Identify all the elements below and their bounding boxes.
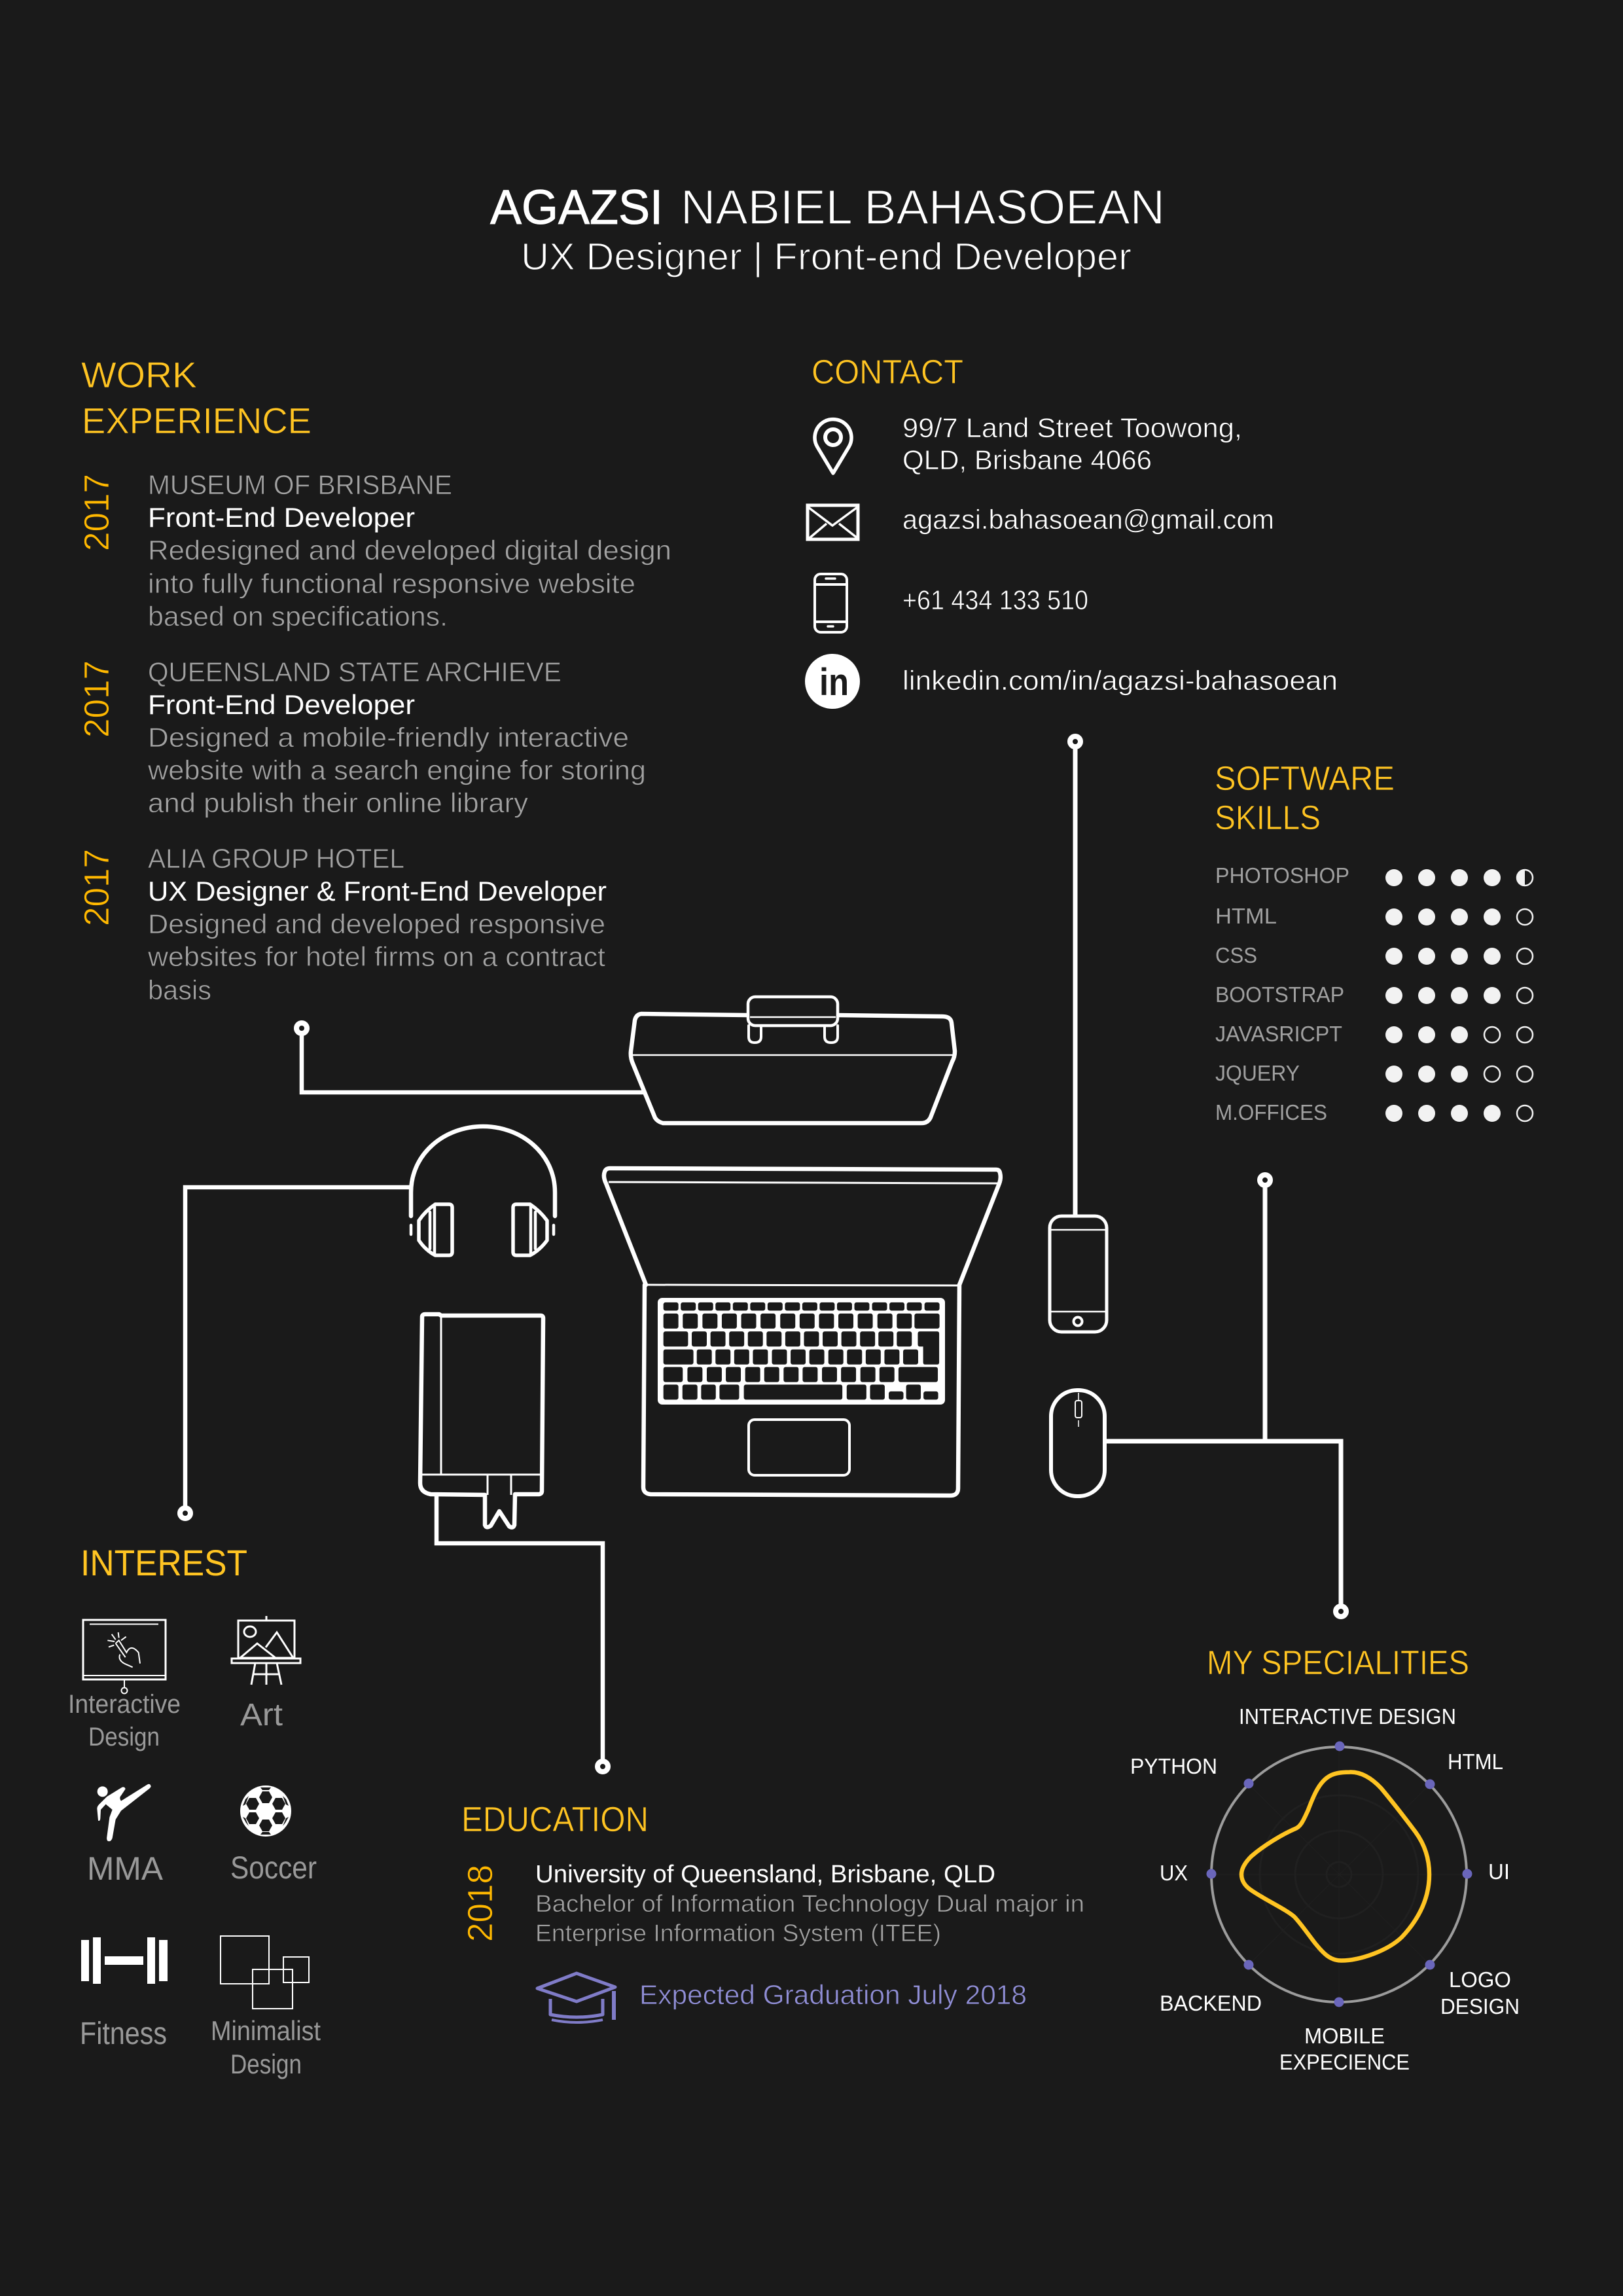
icon: soccer ball xyxy=(240,1785,291,1837)
connector: mouse to skills and specialities xyxy=(1105,1175,1346,1617)
radar labels: UX xyxy=(1160,1861,1188,1885)
heading: interest: INTEREST xyxy=(80,1542,247,1583)
job: alia group hotel: UX Designer & Front-End Developer xyxy=(148,876,607,906)
radar labels: LOGO xyxy=(1449,1967,1511,1992)
label: interactive design: Design xyxy=(88,1723,160,1751)
panel: work experience xyxy=(77,354,671,1005)
text: degree details: University of Queensland, Brisbane, QLD xyxy=(535,1861,995,1888)
icon: book xyxy=(420,1314,543,1528)
radar labels: MOBILE xyxy=(1304,2024,1385,2048)
text: address: 99/7 Land Street Toowong, xyxy=(902,412,1242,443)
job: alia group hotel: basis xyxy=(148,975,211,1005)
job: museum of brisbane: based on specifications. xyxy=(148,601,448,632)
icon: mobile phone xyxy=(815,574,847,632)
icon: dumbbell xyxy=(81,1937,168,1984)
radar labels xyxy=(1130,1704,1520,2074)
job: queensland state archieve: website with a search engine for storing xyxy=(147,755,646,785)
icon: graduation cap xyxy=(537,1973,615,2022)
radar chart xyxy=(1207,1741,1472,2007)
connector: phone to contact xyxy=(1070,736,1080,1215)
heading: software skills: SKILLS xyxy=(1215,799,1321,837)
skill: bootstrap xyxy=(1215,982,1533,1007)
skill: html: HTML xyxy=(1215,904,1277,928)
radar outline xyxy=(1241,1772,1429,1961)
text: phone number: +61 434 133 510 xyxy=(902,584,1088,615)
radar labels: DESIGN xyxy=(1440,1994,1520,2018)
text: address xyxy=(902,412,1242,475)
skill: html xyxy=(1215,904,1533,928)
label: soccer: Soccer xyxy=(230,1851,317,1886)
skill: photoshop: PHOTOSHOP xyxy=(1215,863,1349,888)
job: alia group hotel xyxy=(77,843,607,1005)
job: museum of brisbane xyxy=(77,469,671,632)
icon: laptop xyxy=(604,1168,1001,1496)
job: museum of brisbane: MUSEUM OF BRISBANE xyxy=(148,469,452,500)
heading: work experience: EXPERIENCE xyxy=(82,400,312,441)
heading: education: EDUCATION xyxy=(461,1800,649,1839)
text: degree details: Enterprise Information System (ITEE) xyxy=(535,1920,941,1946)
panel: software skills xyxy=(1215,760,1533,1124)
keyboard keys xyxy=(664,1302,940,1399)
label: minimalist design xyxy=(211,2015,321,2079)
icon: mouse xyxy=(1051,1390,1105,1496)
icon: linkedin: in xyxy=(819,661,849,704)
label: mma: MMA xyxy=(87,1850,164,1887)
label: minimalist design: Minimalist xyxy=(211,2015,321,2046)
job: museum of brisbane: Front-End Developer xyxy=(148,502,415,533)
panel: education xyxy=(461,1800,1084,2022)
connector: briefcase to work experience xyxy=(296,1023,644,1092)
radar axis dots xyxy=(1207,1741,1472,2007)
skill: css xyxy=(1215,943,1533,967)
keyboard xyxy=(658,1298,945,1405)
icon: overlapping rectangles xyxy=(221,1936,309,2009)
heading: work experience: WORK xyxy=(81,354,197,395)
text: degree details xyxy=(535,1861,1084,1946)
year: 2018: 2018 xyxy=(461,1865,500,1942)
icon: headphones xyxy=(411,1126,555,1255)
connector: book to education xyxy=(437,1495,608,1772)
radar labels: EXPECIENCE xyxy=(1279,2050,1410,2074)
skill: jquery xyxy=(1215,1061,1533,1085)
heading: software skills: SOFTWARE xyxy=(1215,760,1395,798)
text: degree details: Bachelor of Information Technology Dual major in xyxy=(535,1890,1084,1917)
skill: jquery: JQUERY xyxy=(1215,1061,1300,1085)
heading: software skills xyxy=(1215,760,1395,837)
text: address: QLD, Brisbane 4066 xyxy=(902,444,1152,475)
icon: location pin xyxy=(815,420,851,473)
title xyxy=(490,180,1165,278)
job: alia group hotel: ALIA GROUP HOTEL xyxy=(148,843,404,874)
title: UX Designer | Front-end Developer xyxy=(521,236,1132,278)
icon: art easel xyxy=(232,1616,300,1685)
job: alia group hotel: Designed and developed responsive xyxy=(148,908,605,939)
icon: envelope xyxy=(808,505,858,539)
radar labels: PYTHON xyxy=(1130,1754,1217,1778)
job: queensland state archieve: QUEENSLAND STATE ARCHIEVE xyxy=(148,656,562,687)
heading: my specialities: MY SPECIALITIES xyxy=(1207,1644,1469,1682)
job: queensland state archieve: 2017 xyxy=(77,660,116,738)
job: alia group hotel: 2017 xyxy=(77,849,116,926)
heading: contact: CONTACT xyxy=(812,353,963,391)
skill: css: CSS xyxy=(1215,943,1257,967)
icon: linkedin xyxy=(805,654,860,709)
job: museum of brisbane: Redesigned and developed digital design xyxy=(148,535,671,565)
connector: headphones to interest xyxy=(180,1187,411,1518)
text: expected graduation: Expected Graduation July 2018 xyxy=(639,1979,1027,2010)
skill: javascript xyxy=(1215,1022,1533,1046)
laptop base xyxy=(643,1285,959,1496)
job: alia group hotel: websites for hotel firms on a contract xyxy=(147,941,605,972)
panel: contact xyxy=(805,353,1338,709)
job: queensland state archieve: Front-End Developer xyxy=(148,689,415,720)
panel: interest xyxy=(68,1542,321,2079)
icon: interactive screen xyxy=(83,1620,166,1694)
radar labels: INTERACTIVE DESIGN xyxy=(1239,1704,1456,1729)
skill: bootstrap: BOOTSTRAP xyxy=(1215,982,1344,1007)
label: fitness: Fitness xyxy=(80,2017,167,2051)
job: queensland state archieve: Designed a mobile-friendly interactive xyxy=(148,722,629,753)
text: linkedin url: linkedin.com/in/agazsi-bahasoean xyxy=(902,665,1338,696)
label: minimalist design: Design xyxy=(230,2049,302,2079)
panel: my specialities xyxy=(1130,1644,1520,2074)
title: NABIEL BAHASOEAN xyxy=(681,180,1165,234)
skill: javascript: JAVASRICPT xyxy=(1215,1022,1342,1046)
job: museum of brisbane: into fully functional responsive website xyxy=(148,568,635,599)
icon: briefcase xyxy=(631,997,955,1123)
skill: m.offices: M.OFFICES xyxy=(1215,1100,1327,1124)
label: art: Art xyxy=(240,1698,283,1732)
icon: mma fighter xyxy=(97,1784,151,1841)
job: queensland state archieve xyxy=(77,656,646,818)
job: museum of brisbane: 2017 xyxy=(77,474,116,551)
heading: work experience xyxy=(81,354,312,441)
radar labels: BACKEND xyxy=(1160,1991,1262,2015)
title: AGAZSI xyxy=(490,180,663,234)
radar labels: HTML xyxy=(1448,1749,1503,1774)
laptop screen xyxy=(604,1168,1001,1285)
radar labels: UI xyxy=(1488,1859,1510,1884)
trackpad xyxy=(749,1420,849,1475)
job: queensland state archieve: and publish their online library xyxy=(148,787,528,818)
text: email: agazsi.bahasoean@gmail.com xyxy=(902,504,1274,535)
label: interactive design: Interactive xyxy=(68,1690,181,1719)
skill: photoshop xyxy=(1215,863,1533,888)
label: interactive design xyxy=(68,1690,181,1751)
icon: smartphone xyxy=(1050,1216,1107,1332)
skill: m.offices xyxy=(1215,1100,1533,1124)
